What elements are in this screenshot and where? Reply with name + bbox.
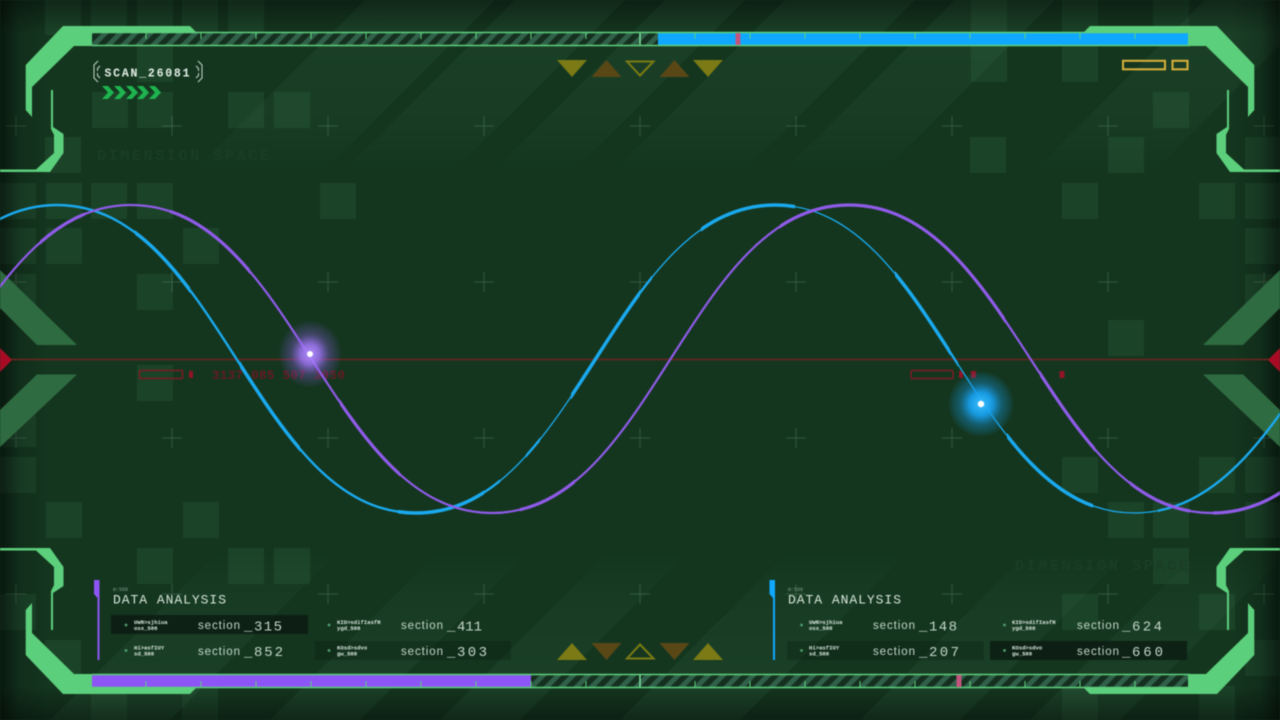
left side chevrons <box>0 270 77 447</box>
hud frame bottom right corner <box>1084 548 1280 694</box>
row: section 148: osx_588 <box>809 625 833 632</box>
row: section 148: section <box>873 620 915 632</box>
row: section 624: 624 <box>1132 620 1162 636</box>
row: section 852: Hi>asfIUY <box>134 644 165 652</box>
row: section 411: ygd_588 <box>337 625 361 632</box>
faint label top left: DIMENSION SPACE <box>97 148 269 165</box>
green chevrons <box>102 86 161 99</box>
blue sine wave <box>0 205 1280 513</box>
row: section 624 <box>1003 619 1162 636</box>
blue panel marker <box>770 580 775 660</box>
row: section 411: KID>sdifIasfR <box>337 619 381 626</box>
row: section 852: 852 <box>254 645 283 661</box>
right panel heading: DATA ANALYSIS <box>788 592 901 608</box>
purple sine wave <box>0 205 1280 513</box>
row: section 315: _ <box>243 619 253 635</box>
row: section 852 <box>125 644 283 661</box>
hud frame bottom left corner <box>0 548 196 694</box>
red readout right <box>911 370 1064 378</box>
scan id badge <box>94 61 202 82</box>
panel: data analysis left <box>94 580 511 661</box>
row: section 660: section <box>1077 646 1119 658</box>
hud frame top left corner <box>0 26 196 172</box>
top triangle indicators <box>557 60 723 77</box>
row: section 660: _ <box>1121 645 1131 661</box>
row: section 303: _ <box>446 645 456 661</box>
row: section 207 <box>800 644 959 661</box>
blue glow marker <box>948 371 1014 437</box>
row: section 624: KID>sdifIasfR <box>1012 619 1056 626</box>
bottom triangle indicators <box>557 643 723 660</box>
row: section 303: gw_588 <box>337 650 358 658</box>
row: section 148: UWR>sjhiua <box>809 619 843 626</box>
row: section 207: section <box>873 646 915 658</box>
row: section 148: _ <box>918 619 928 635</box>
left panel row backgrounds <box>111 615 511 660</box>
row: section 660: gw_588 <box>1012 650 1033 658</box>
row: section 315: UWR>sjhiua <box>134 619 168 626</box>
panel: data analysis right <box>770 580 1187 661</box>
red readout left <box>140 369 345 383</box>
row: section 303: 303 <box>457 645 487 661</box>
row: section 624: ygd_588 <box>1012 625 1036 632</box>
row: section 207: sd_588 <box>809 650 830 658</box>
row: section 852: _ <box>243 645 253 661</box>
right panel row backgrounds <box>787 641 1187 660</box>
row: section 411: section <box>401 620 443 632</box>
row: section 207: Hi>asfIUY <box>809 644 840 652</box>
row: section 411: 411 <box>457 620 482 636</box>
background crosses <box>6 116 1274 604</box>
row: section 303: KOsd>sdvo <box>337 644 368 652</box>
row: section 303 <box>328 644 487 661</box>
row: section 411: _ <box>446 619 456 635</box>
faint label bottom right: DIMENSION SPACE <box>1015 558 1188 575</box>
row: section 207: _ <box>918 645 928 661</box>
row: section 315 <box>125 619 282 636</box>
row: section 624: section <box>1077 620 1119 632</box>
row: section 315: osx_588 <box>134 625 158 632</box>
row: section 148 <box>800 619 957 636</box>
right panel heading: m:588 <box>788 587 803 593</box>
hud frame top right corner <box>1084 26 1280 172</box>
left panel heading: DATA ANALYSIS <box>113 592 226 608</box>
row: section 315: section <box>198 620 240 632</box>
row: section 148: 148 <box>929 620 957 636</box>
top progress bar <box>92 32 1190 46</box>
bottom progress bar <box>92 674 1190 688</box>
scan id badge: SCAN_26081 <box>104 68 190 80</box>
row: section 207: 207 <box>929 645 959 661</box>
yellow status boxes <box>1123 61 1188 69</box>
row: section 315: 315 <box>254 620 282 636</box>
row: section 411 <box>328 619 482 636</box>
row: section 852: section <box>198 646 240 658</box>
row: section 624: _ <box>1121 619 1131 635</box>
row: section 303: section <box>401 646 443 658</box>
row: section 660: KOsd>sdvo <box>1012 644 1043 652</box>
purple panel marker <box>94 580 100 660</box>
row: section 660: 660 <box>1132 645 1163 661</box>
purple glow marker <box>278 320 342 388</box>
right side chevrons <box>1203 270 1280 447</box>
row: section 852: sd_588 <box>134 650 155 658</box>
row: section 660 <box>1003 644 1163 661</box>
red center scan line <box>0 348 1280 372</box>
background diagonal stripes bottom <box>50 550 1280 720</box>
red readout left: 3137 085 507 3950 <box>212 369 345 383</box>
left panel heading: m:588 <box>113 587 128 593</box>
background diagonal stripes top <box>190 0 1280 175</box>
